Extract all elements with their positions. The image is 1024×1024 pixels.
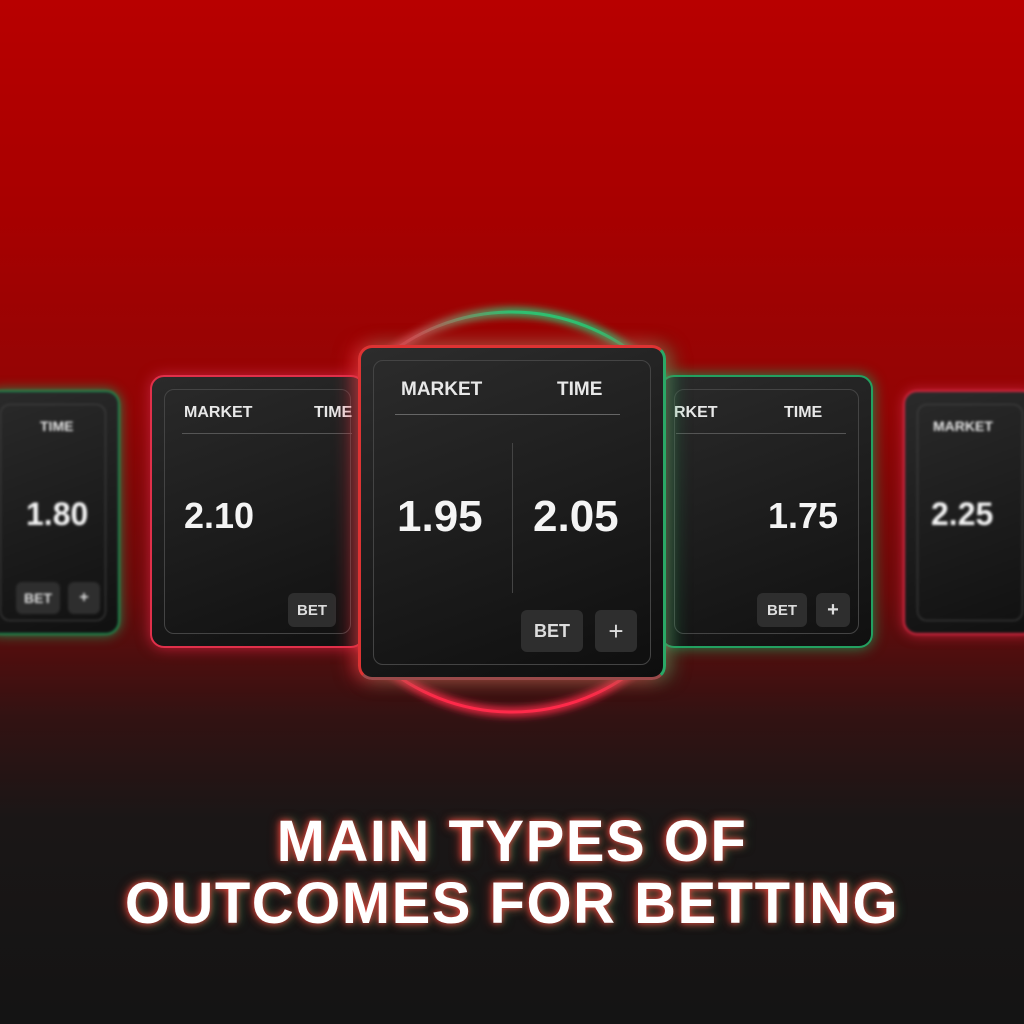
card: far right: 2.25 [931, 496, 993, 532]
card: center [358, 345, 666, 680]
card: far left [0, 390, 120, 635]
card: center: 2.05 [533, 492, 619, 541]
card: right: RKET [674, 404, 718, 421]
card: left: 2.10 [184, 495, 254, 536]
card: right: BET [767, 602, 797, 618]
buttons: BET [534, 620, 570, 640]
card: left [150, 375, 365, 648]
card: far right [903, 390, 1024, 635]
card: far left: + [79, 589, 89, 606]
card: center: + [608, 616, 624, 646]
card: far left: TIME [40, 418, 73, 434]
card: left: MARKET [184, 404, 252, 421]
odds: 1.95 [397, 492, 483, 541]
title [118, 809, 902, 936]
card: far left: 1.80 [26, 496, 88, 532]
card: left: TIME [314, 404, 352, 421]
card: right: 1.75 [768, 495, 838, 536]
card: right [660, 375, 873, 648]
card: left: BET [297, 602, 327, 618]
header labels: MARKET [401, 379, 482, 400]
card: right: TIME [784, 404, 822, 421]
card: far right: MARKET [933, 418, 993, 434]
card: center: TIME [557, 379, 602, 400]
card: far left: BET [24, 590, 52, 606]
buttons [521, 610, 583, 652]
title: MAIN TYPES OF [277, 809, 747, 874]
card: right: + [827, 598, 839, 620]
title: OUTCOMES FOR BETTING [125, 871, 899, 936]
